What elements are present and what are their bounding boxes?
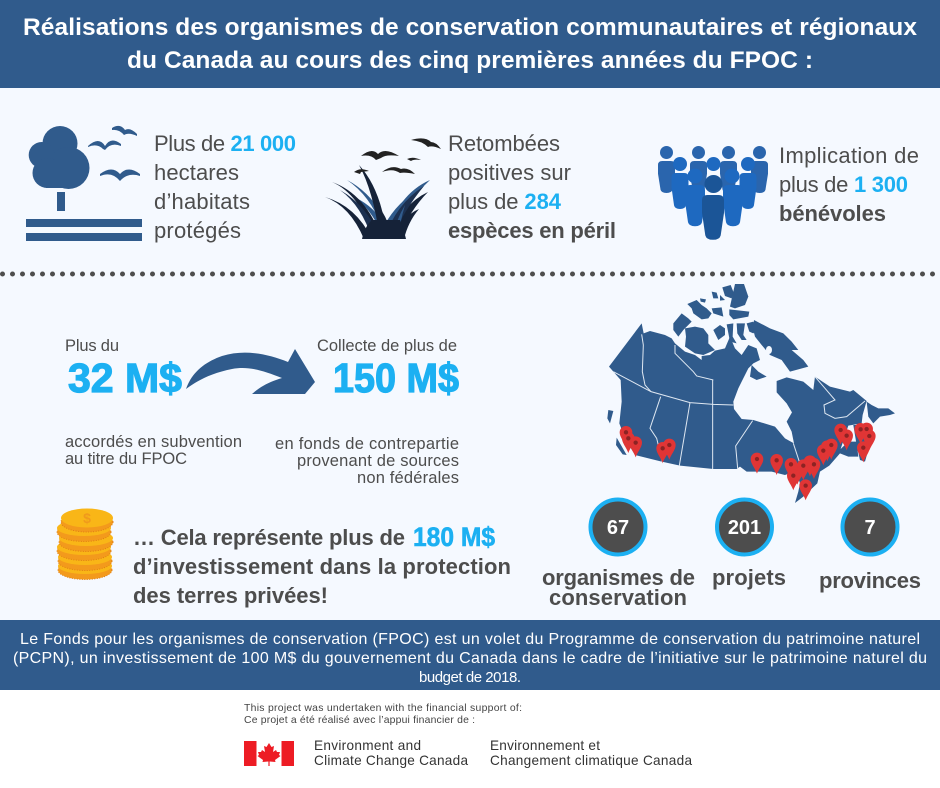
text: 32 M$ granted: accordés en subvention [65,433,242,451]
map pins [620,423,876,500]
footer funding credit [0,690,940,788]
bottom info band: (PCPN), un investissement de 100 M$ du gouvernement du Canada dans le cadre de l’initiative sur le patrimoine naturel du [13,650,927,667]
text: habitats protected: protégés [154,218,241,243]
text: 180 M$ investment: des terres privées! [133,583,328,608]
text: habitats protected [154,131,296,243]
text: volunteers: bénévoles [779,201,886,226]
stat: 201 projects: projets [712,565,786,590]
icon: coin stack: $ [83,510,91,526]
text: species at risk: Retombées [448,131,560,156]
footer funding credit: This project was undertaken with the financial support of: [244,703,522,714]
stat: 67 organisms [542,500,695,610]
text: habitats protected: Plus de 21 000 [154,131,296,156]
bottom info band: Le Fonds pour les organismes de conservation (FPOC) est un volet du Programme de conservation du patrimoine naturel [20,631,920,648]
stat: 201 projects [712,500,786,590]
icon: grass and birds [325,138,441,239]
footer funding credit: Changement climatique Canada [490,753,692,768]
bottom info band [0,620,940,690]
icon: tree and birds [26,126,142,241]
footer funding credit: Ce projet a été réalisé avec l’appui financier de : [244,715,475,726]
text: 180 M$ investment: d’investissement dans la protection [133,554,511,579]
stat: 7 provinces: 7 [864,517,876,539]
header banner [0,0,940,88]
text: 32 M$ granted: Plus du [65,337,119,355]
text: volunteers: Implication de [779,143,919,168]
footer funding credit: Climate Change Canada [314,753,468,768]
stat: 67 organisms: organismes de [542,565,695,590]
text: species at risk: positives sur [448,160,571,185]
stat: 7 provinces: provinces [819,568,921,593]
text: 150 M$ matched: Collecte de plus de [317,337,457,355]
stat: 67 organisms: conservation [549,585,687,610]
text: species at risk: espèces en péril [448,218,616,243]
arrow [186,349,315,394]
text: 32 M$ granted: au titre du FPOC [65,450,187,468]
stat: 201 projects: 201 [728,517,761,539]
text: volunteers [779,143,919,226]
icon: volunteers group [658,146,768,240]
stat: 7 provinces [819,500,921,593]
text: 150 M$ matched: en fonds de contrepartie [275,435,459,453]
text: 32 M$ granted [65,337,242,468]
footer funding credit: Environment and [314,738,421,753]
icon: coin stack [57,508,113,580]
text: 180 M$ investment: … Cela représente plus de [133,525,405,550]
header banner: Réalisations des organismes de conservation communautaires et régionaux [23,14,917,41]
text: species at risk [448,131,616,243]
icon: Canadian flag [244,741,294,766]
text: volunteers: plus de 1 300 [779,172,908,197]
footer funding credit: Environnement et [490,738,600,753]
text: habitats protected: d’habitats [154,189,250,214]
stat: 67 organisms: 67 [607,517,629,539]
text: species at risk: plus de 284 [448,189,562,214]
map of Canada [607,284,895,503]
text: 180 M$ investment: 180 M$ [413,522,495,552]
text: 150 M$ matched: 150 M$ [333,355,459,401]
bottom info band: budget de 2018. [419,669,521,686]
text: habitats protected: hectares [154,160,239,185]
text: 150 M$ matched: provenant de sources [297,452,459,470]
text: 150 M$ matched: non fédérales [357,469,459,487]
text: 32 M$ granted: 32 M$ [68,355,182,401]
text: 150 M$ matched [275,337,459,487]
header banner: du Canada au cours des cinq premières années du FPOC : [127,47,813,74]
text: 180 M$ investment [133,522,511,608]
